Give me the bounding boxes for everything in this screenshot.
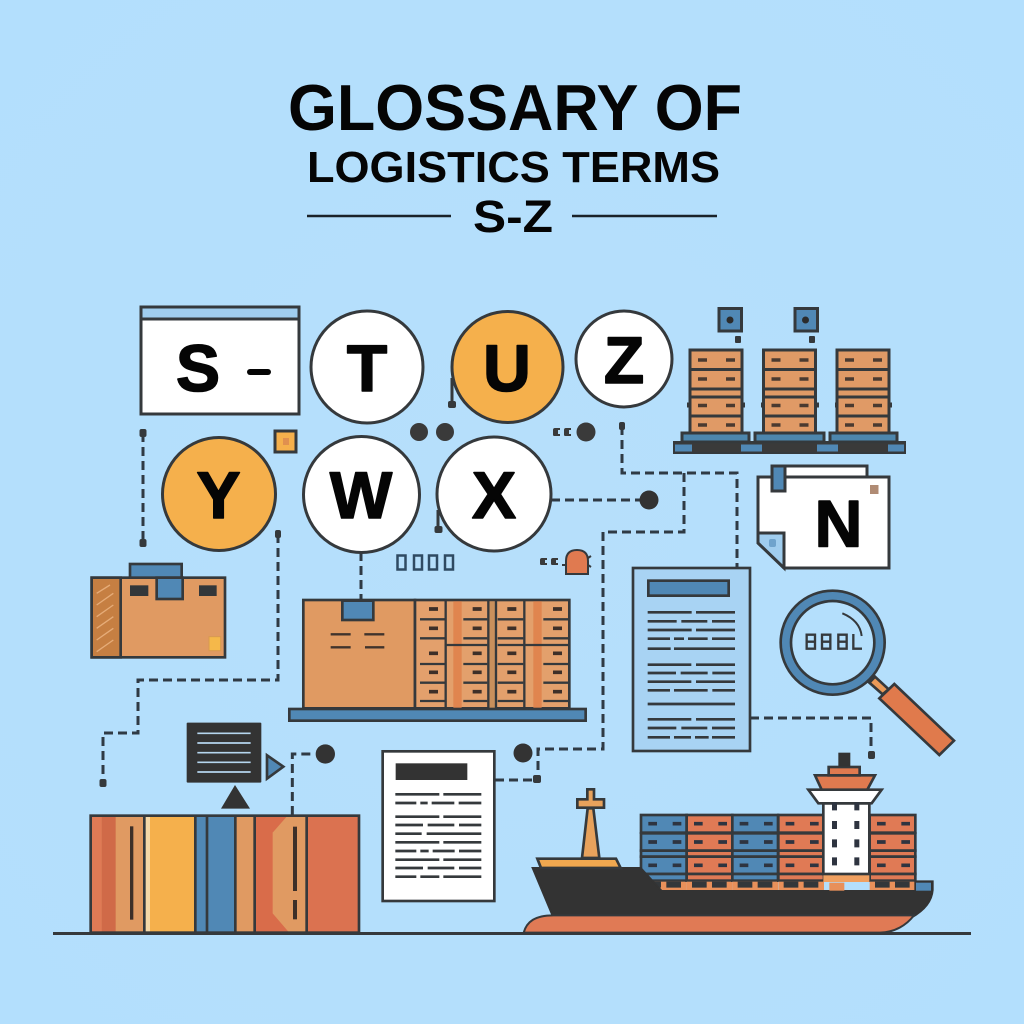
circle letter X bbox=[434, 437, 551, 551]
icon: pair of dots bbox=[410, 423, 454, 441]
connector: left dashed bbox=[140, 429, 146, 547]
card: N note: N bbox=[815, 486, 862, 560]
circle letter U: U bbox=[483, 331, 531, 405]
document: report bbox=[633, 568, 750, 751]
circle letter X: X bbox=[472, 458, 516, 532]
pallet base bbox=[674, 433, 905, 453]
container stacks bbox=[641, 815, 915, 891]
title line 2: LOGISTICS TERMS bbox=[307, 143, 720, 192]
card: N note bbox=[758, 466, 889, 568]
connector: Z to document branches bbox=[495, 422, 737, 783]
circle letter U bbox=[448, 312, 563, 422]
circle letter T bbox=[311, 311, 423, 423]
connector: report to ship bbox=[750, 718, 875, 759]
hull bbox=[533, 868, 933, 917]
icon: magnifying glass bbox=[781, 591, 954, 755]
document: bill bbox=[383, 751, 494, 901]
connector: X to dot bbox=[551, 490, 658, 510]
circle letter Y: Y bbox=[196, 458, 241, 532]
circle letter Z bbox=[576, 311, 672, 407]
circle letter Z: Z bbox=[604, 323, 644, 397]
icon: monitor on stand bbox=[187, 723, 283, 809]
lower hull bbox=[524, 915, 914, 933]
connector: books to dot bbox=[292, 744, 335, 815]
books row bbox=[91, 816, 359, 933]
connector: W to crate bbox=[360, 552, 362, 600]
icon: orange square bbox=[275, 431, 296, 452]
title line 1: GLOSSARY OF bbox=[288, 71, 742, 144]
icon: orange bell bbox=[540, 550, 591, 574]
magnifier digits bbox=[807, 634, 862, 649]
connector: long dashed to monitor bbox=[100, 530, 281, 787]
icon: quote marks and dot bbox=[553, 422, 596, 442]
circle letter W bbox=[304, 436, 420, 552]
stern rail bbox=[916, 883, 931, 891]
icon: cardboard box bbox=[92, 564, 225, 657]
title block bbox=[288, 71, 742, 242]
bow deck bbox=[537, 859, 621, 868]
box stacks bbox=[687, 350, 892, 433]
card: S dash bbox=[141, 307, 299, 414]
card: S dash: S bbox=[176, 331, 220, 405]
icon: pallet stacks bbox=[674, 308, 905, 453]
container ship bbox=[524, 753, 933, 933]
circle letter Y bbox=[162, 438, 276, 550]
ground line bbox=[53, 932, 971, 935]
circle letter T: T bbox=[347, 331, 387, 405]
subtitle S-Z with rules: S-Z bbox=[473, 191, 553, 242]
icon: small rectangle row bbox=[398, 556, 453, 570]
pallet beacons bbox=[719, 308, 818, 343]
crate with drawers on pallet bbox=[289, 600, 586, 721]
circle letter W: W bbox=[330, 458, 393, 532]
mast bbox=[577, 789, 604, 858]
bridge tower bbox=[808, 753, 882, 891]
